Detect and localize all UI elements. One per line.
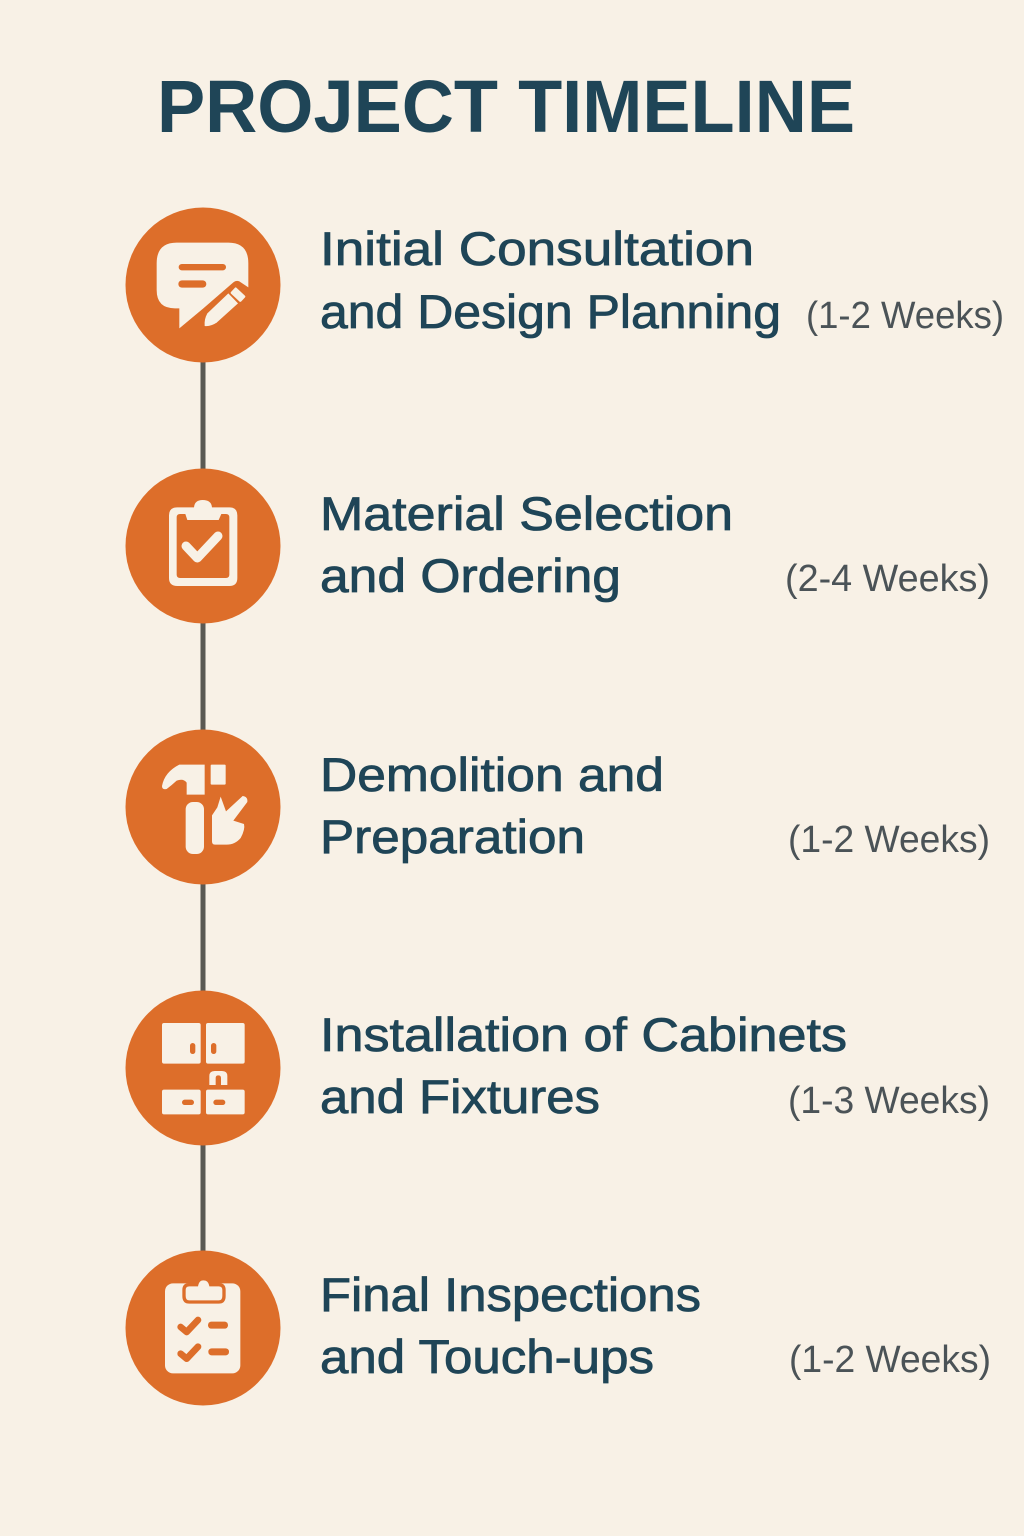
step 4: installation: and Fixtures xyxy=(320,1070,600,1123)
step 3: demolition xyxy=(126,730,990,884)
step 4: installation xyxy=(126,990,990,1146)
step 2 duration: (2-4 Weeks) xyxy=(785,558,990,600)
step 5 heading: Final Inspections xyxy=(320,1268,701,1321)
step 5: final inspections xyxy=(126,1250,991,1406)
step 2 heading: Material Selection xyxy=(320,487,733,540)
step 3: demolition: Preparation xyxy=(320,810,585,863)
step 1: initial consultation: and Design Planning xyxy=(320,285,781,338)
step 1: initial consultation xyxy=(126,208,1004,362)
step 5 duration: (1-2 Weeks) xyxy=(789,1339,991,1381)
step 3 heading: Demolition and xyxy=(320,748,664,801)
step 5: final inspections: and Touch-ups xyxy=(320,1330,654,1383)
icon: checklist clipboard xyxy=(126,1250,280,1406)
icon: speech bubble with pencil xyxy=(126,208,280,362)
title: PROJECT TIMELINE xyxy=(157,65,855,148)
step 4 duration: (1-3 Weeks) xyxy=(788,1080,990,1122)
step 1 heading: Initial Consultation xyxy=(320,222,754,275)
icon: clipboard with check xyxy=(126,468,280,624)
timeline connector line xyxy=(200,355,206,1255)
step 4 heading: Installation of Cabinets xyxy=(320,1008,847,1061)
step 2: material selection: and Ordering xyxy=(320,549,621,602)
step 2: material selection xyxy=(126,468,990,624)
icon: hammer and hand xyxy=(126,730,280,884)
step 3 duration: (1-2 Weeks) xyxy=(788,819,990,861)
icon: cabinets xyxy=(126,990,280,1146)
step 1 duration: (1-2 Weeks) xyxy=(806,295,1004,337)
